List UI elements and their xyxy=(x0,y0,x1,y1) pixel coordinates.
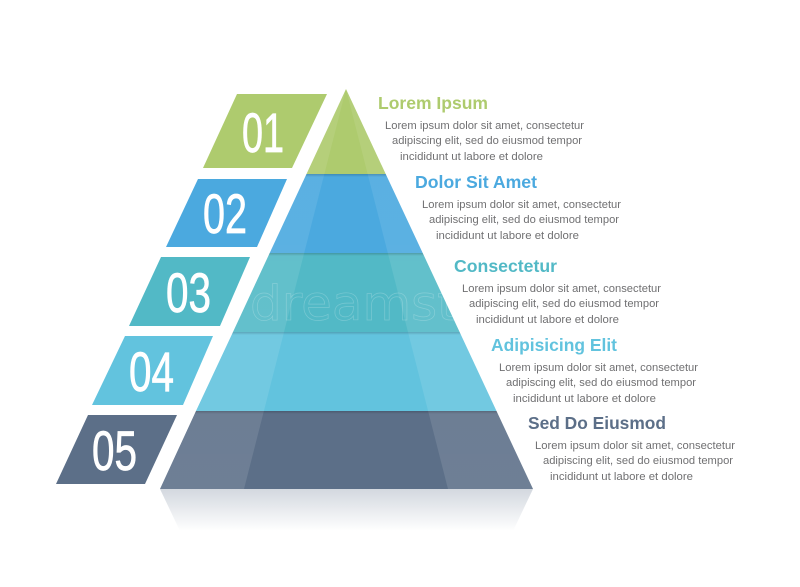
text block: Sed Do Eiusmod: adipiscing elit, sed do eiusmod tempor xyxy=(543,455,733,467)
text block: Consectetur: Lorem ipsum dolor sit amet, consectetur xyxy=(462,283,661,295)
text block: Consectetur: Consectetur xyxy=(454,256,557,276)
pyramid chart xyxy=(160,89,533,489)
text block: Dolor Sit Amet: adipiscing elit, sed do eiusmod tempor xyxy=(429,214,619,226)
pyramid band 2 xyxy=(270,174,423,253)
text block: Dolor Sit Amet: incididunt ut labore et dolore xyxy=(436,230,579,242)
pyramid band 5 xyxy=(160,411,533,489)
number tab 01 xyxy=(203,94,327,168)
watermark: dreamstime xyxy=(250,276,550,332)
pyramid band 1 xyxy=(306,89,386,174)
text block: Lorem Ipsum: Lorem ipsum dolor sit amet, consectetur xyxy=(385,120,584,132)
text block: Adipisicing Elit: incididunt ut labore et dolore xyxy=(513,393,656,405)
text block: Consectetur xyxy=(454,256,661,326)
text block: Adipisicing Elit: Lorem ipsum dolor sit amet, consectetur xyxy=(499,362,698,374)
text block: Dolor Sit Amet: Dolor Sit Amet xyxy=(415,172,537,192)
number tab 03: 03 xyxy=(166,261,211,324)
number tab 02: 02 xyxy=(203,182,247,245)
text block: Lorem Ipsum: incididunt ut labore et dolore xyxy=(400,151,543,163)
text block: Sed Do Eiusmod xyxy=(528,413,735,483)
number tab 03 xyxy=(129,257,250,326)
text block: Sed Do Eiusmod: Sed Do Eiusmod xyxy=(528,413,666,433)
text block: Lorem Ipsum: Lorem Ipsum xyxy=(378,93,488,113)
number tab 05 xyxy=(56,415,177,484)
text block: Adipisicing Elit: Adipisicing Elit xyxy=(491,335,617,355)
text block: Dolor Sit Amet xyxy=(415,172,621,242)
text block: Consectetur: incididunt ut labore et dolore xyxy=(476,314,619,326)
text block: Adipisicing Elit xyxy=(491,335,698,405)
number tab 04: 04 xyxy=(129,340,174,403)
pyramid band 4 xyxy=(196,332,496,411)
text block: Sed Do Eiusmod: Lorem ipsum dolor sit amet, consectetur xyxy=(535,440,735,452)
pyramid band 3 xyxy=(233,253,460,332)
number tab 02 xyxy=(166,179,287,247)
text block: Sed Do Eiusmod: incididunt ut labore et dolore xyxy=(550,471,693,483)
number tab 05: 05 xyxy=(92,419,137,482)
text block: Consectetur: adipiscing elit, sed do eiusmod tempor xyxy=(469,298,659,310)
pyramid reflection xyxy=(160,489,533,531)
text block: Lorem Ipsum xyxy=(378,93,584,163)
number tab 01: 01 xyxy=(242,101,284,164)
text block: Dolor Sit Amet: Lorem ipsum dolor sit amet, consectetur xyxy=(422,199,621,211)
text block: Lorem Ipsum: adipiscing elit, sed do eiusmod tempor xyxy=(392,135,582,147)
text block: Adipisicing Elit: adipiscing elit, sed do eiusmod tempor xyxy=(506,377,696,389)
number tab 04 xyxy=(92,336,213,405)
